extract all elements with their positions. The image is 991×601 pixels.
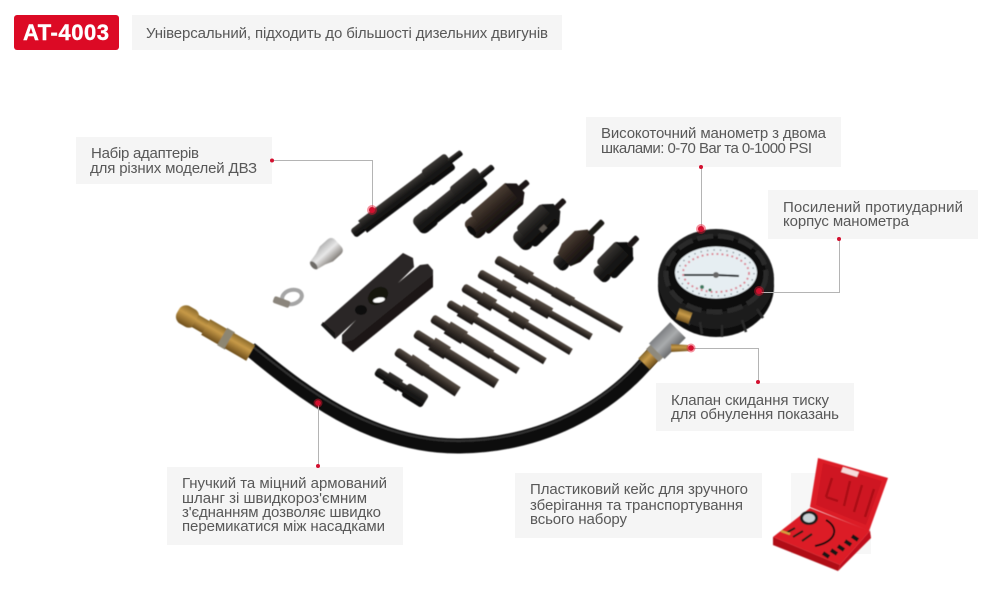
label: hose: з'єднанням дозволяє швидко xyxy=(182,504,381,521)
steel nozzle xyxy=(305,236,345,274)
adapter 3 xyxy=(460,171,537,243)
rods set xyxy=(372,253,625,408)
rod 2 xyxy=(476,267,594,343)
hose xyxy=(250,346,655,446)
gauge dial xyxy=(675,246,757,298)
label: release valve: Клапан скидання тиску xyxy=(671,392,830,409)
headline note xyxy=(132,15,562,50)
rod 3 xyxy=(460,281,574,357)
label: hose: Гнучкий та міцний армований xyxy=(182,475,387,492)
brass quick connector xyxy=(173,302,256,362)
label: plastic case: Пластиковий кейс для зручного xyxy=(530,481,748,498)
rod 1 xyxy=(493,253,625,335)
rod 5 xyxy=(428,312,522,377)
adapter 1 xyxy=(347,145,467,242)
label: gauge housing: Посилений протиударний xyxy=(783,199,963,216)
pointer: release valve xyxy=(686,344,760,384)
label: hose xyxy=(167,467,403,545)
label: gauge scales xyxy=(586,117,841,167)
pointer: hose xyxy=(314,398,322,468)
label: gauge housing: корпус манометра xyxy=(783,213,910,230)
label: adapters xyxy=(76,137,272,184)
headline note: Універсальний, підходить до більшості дизельних двигунів xyxy=(146,25,548,42)
rod 6 xyxy=(411,327,500,390)
label: hose: перемикатися між насадками xyxy=(182,518,385,535)
label: release valve xyxy=(656,383,854,431)
pointer: gauge housing xyxy=(754,237,841,296)
label: adapters: Набір адаптерів xyxy=(91,145,199,162)
adapter 2 xyxy=(410,158,500,237)
rod 8 xyxy=(372,365,429,408)
model badge xyxy=(14,15,119,50)
adapter 6 xyxy=(589,228,647,287)
rod 7 xyxy=(392,346,461,397)
label: gauge housing xyxy=(768,190,978,239)
adapter 5 xyxy=(548,212,612,276)
label: plastic case: зберігання та транспортування xyxy=(530,497,743,514)
label: plastic case xyxy=(515,473,762,538)
label: adapters: для різних моделей ДВЗ xyxy=(90,160,257,177)
label: gauge scales: шкалами: 0-70 Bar та 0-1000 PSI xyxy=(601,140,812,157)
model badge: AT-4003 xyxy=(23,20,109,45)
pointer: adapters xyxy=(270,158,377,215)
case image backdrop xyxy=(791,473,871,554)
pointer: gauge scales xyxy=(696,165,706,234)
pressure gauge xyxy=(658,229,774,337)
label: release valve: для обнулення показань xyxy=(671,406,839,423)
label: gauge scales: Високоточний манометр з двома xyxy=(601,125,827,142)
T fitting with release valve xyxy=(636,308,693,372)
adapter 4 xyxy=(508,190,574,255)
icon: red tool case xyxy=(773,458,888,571)
hose clamp xyxy=(272,288,303,308)
rod 4 xyxy=(445,297,548,367)
label: plastic case: всього набору xyxy=(530,511,628,528)
label: hose: шланг зі швидкороз'ємним xyxy=(182,490,367,507)
adapters set xyxy=(347,145,647,287)
slotted fork block xyxy=(321,253,433,352)
